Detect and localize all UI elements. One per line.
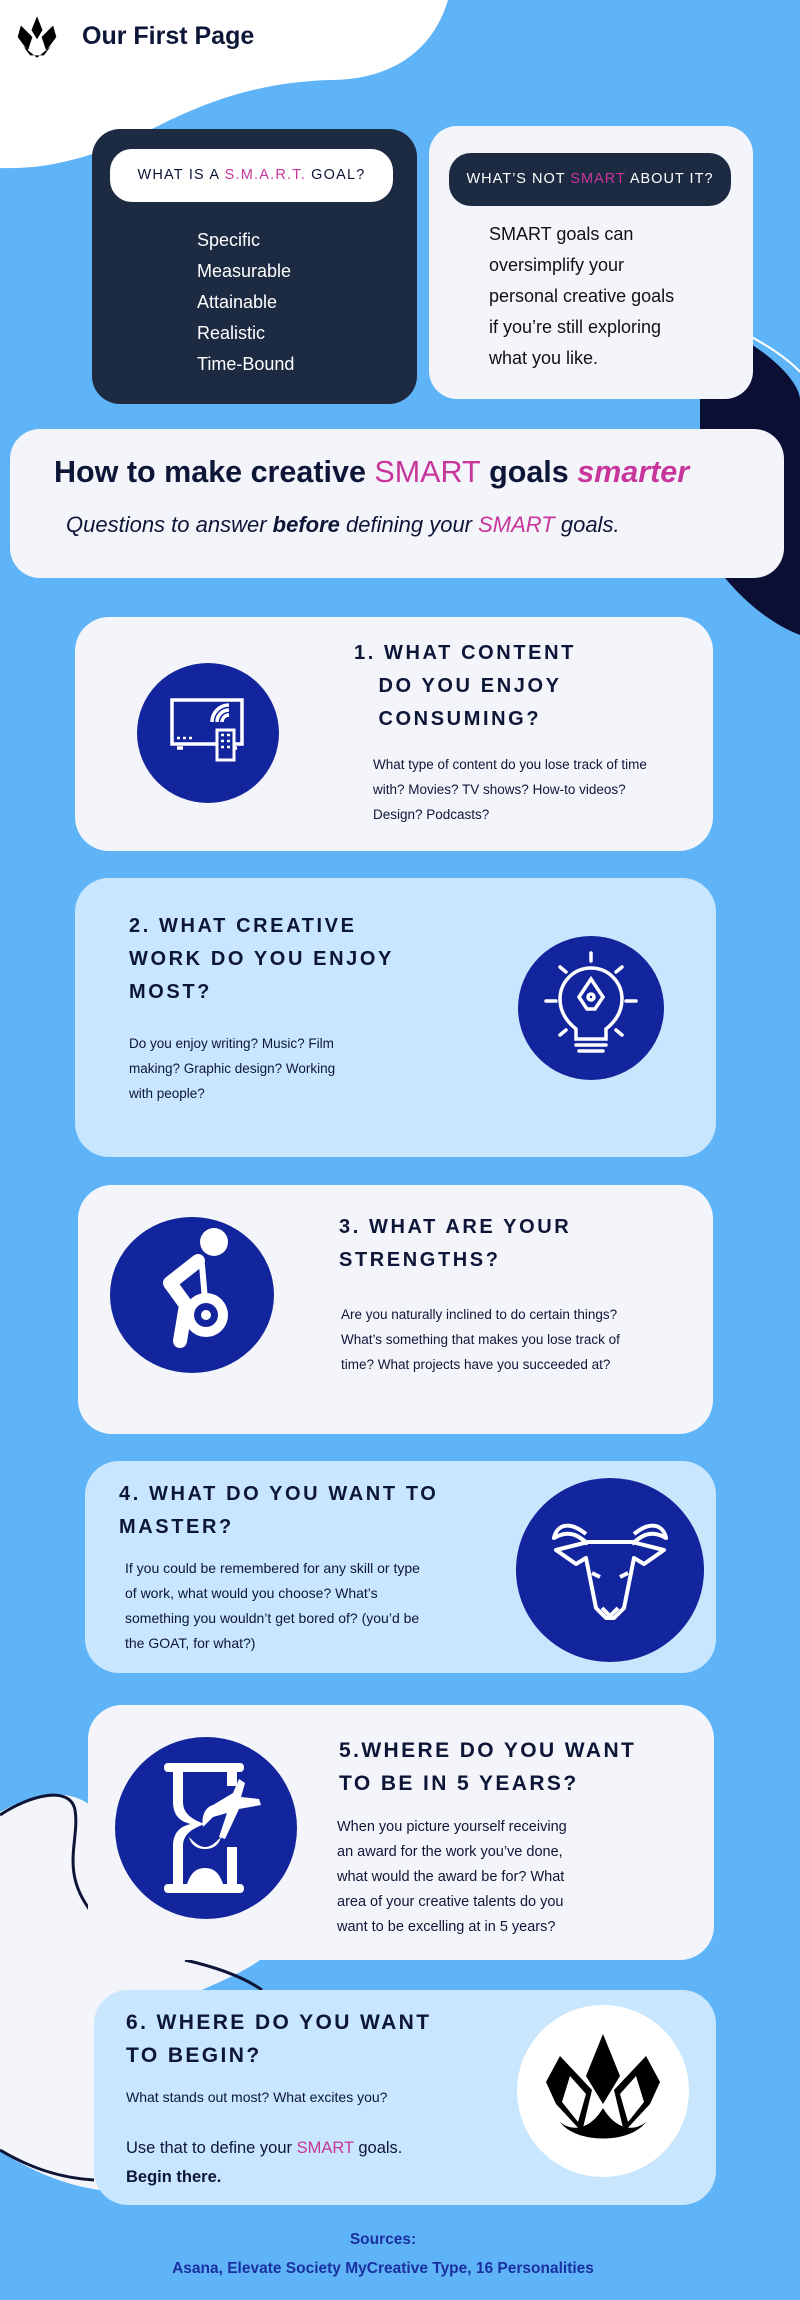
title: 1. WHAT CONTENT xyxy=(354,642,576,664)
list: Specific xyxy=(197,230,260,250)
body: What stands out most? What excites you? xyxy=(126,2089,387,2105)
title: MASTER? xyxy=(119,1516,234,1538)
title: DO YOU ENJOY xyxy=(378,675,562,697)
closing text xyxy=(126,2134,402,2192)
icon: lotus xyxy=(516,2004,690,2178)
card 6 xyxy=(94,1990,716,2205)
title: MOST? xyxy=(129,981,212,1003)
body: What type of content do you lose track of time with? Movies? TV shows? How-to videos? Design? Podcasts? xyxy=(373,757,647,822)
pill heading: WHAT IS A S.M.A.R.T. GOAL? xyxy=(137,167,366,183)
title: How to make creative SMART goals smarter xyxy=(54,455,689,489)
title: 6. WHERE DO YOU WANT xyxy=(126,2011,431,2034)
sources: Sources: xyxy=(350,2231,416,2248)
body: with people? xyxy=(129,1086,205,1101)
body: time? What projects have you succeeded at? xyxy=(341,1357,610,1372)
title: 4. WHAT DO YOU WANT TO xyxy=(119,1483,438,1505)
icon: lightbulb xyxy=(518,935,664,1081)
body: Do you enjoy writing? Music? Film xyxy=(129,1036,334,1051)
title: CONSUMING? xyxy=(378,708,541,730)
body: If you could be remembered for any skill or type of work, what would you choose? What’s something you wouldn’t get bored of? (you’d be the GOAT, for what?) xyxy=(125,1560,420,1651)
closing text: Begin there. xyxy=(126,2168,221,2186)
title xyxy=(126,2006,431,2072)
closing text: Use that to define your SMART goals. xyxy=(126,2139,402,2157)
pill heading xyxy=(110,149,393,202)
body xyxy=(129,1031,389,1106)
body: When you picture yourself receiving xyxy=(337,1819,567,1835)
dark pill heading: WHAT’S NOT SMART ABOUT IT? xyxy=(466,171,714,187)
text: SMART goals can xyxy=(489,224,633,244)
body: What’s something that makes you lose track of xyxy=(341,1332,620,1347)
body xyxy=(341,1302,681,1377)
text: what you like. xyxy=(489,348,598,368)
panel: main heading xyxy=(10,429,784,578)
header title: Our First Page xyxy=(82,22,254,50)
icon: goat xyxy=(516,1478,704,1662)
text: personal creative goals xyxy=(489,286,674,306)
header logo icon xyxy=(14,14,60,60)
title xyxy=(129,910,394,1009)
body xyxy=(337,1815,627,1940)
title: WORK DO YOU ENJOY xyxy=(129,948,394,970)
list xyxy=(197,225,294,380)
icon: hourglass with plane xyxy=(115,1737,297,1919)
card 5 xyxy=(88,1705,714,1960)
sources: Asana, Elevate Society MyCreative Type, 16 Personalities xyxy=(172,2260,594,2277)
title: 3. WHAT ARE YOUR xyxy=(339,1216,571,1238)
title xyxy=(339,1734,636,1800)
body: area of your creative talents do you xyxy=(337,1894,564,1910)
icon: tv xyxy=(137,662,279,804)
list: Attainable xyxy=(197,292,277,312)
text: if you’re still exploring xyxy=(489,317,661,337)
title xyxy=(339,1211,571,1277)
title: STRENGTHS? xyxy=(339,1249,501,1271)
list: Realistic xyxy=(197,323,265,343)
title: 5.WHERE DO YOU WANT xyxy=(339,1739,636,1762)
body: an award for the work you’ve done, xyxy=(337,1844,563,1860)
text: oversimplify your xyxy=(489,255,624,275)
body: Are you naturally inclined to do certain things? xyxy=(341,1307,617,1322)
card 2 xyxy=(75,878,716,1157)
title xyxy=(119,1478,438,1544)
list: Time-Bound xyxy=(197,354,294,374)
title: TO BE IN 5 YEARS? xyxy=(339,1772,579,1795)
icon: weightlifter xyxy=(110,1213,274,1377)
card 3 xyxy=(78,1185,713,1434)
card 4 xyxy=(85,1461,716,1673)
dark pill heading xyxy=(449,153,731,206)
body: making? Graphic design? Working xyxy=(129,1061,335,1076)
card 1 xyxy=(75,617,713,851)
title: 2. WHAT CREATIVE xyxy=(129,915,357,937)
text xyxy=(489,219,674,374)
list: Measurable xyxy=(197,261,291,281)
body: want to be excelling at in 5 years? xyxy=(337,1919,555,1935)
title: TO BEGIN? xyxy=(126,2044,262,2067)
panel: what is a SMART goal xyxy=(92,129,417,404)
panel: what's not smart xyxy=(429,126,753,399)
sources xyxy=(0,2225,766,2283)
subtitle: Questions to answer before defining your SMART goals. xyxy=(66,512,620,537)
body: what would the award be for? What xyxy=(337,1869,564,1885)
title xyxy=(354,637,576,736)
